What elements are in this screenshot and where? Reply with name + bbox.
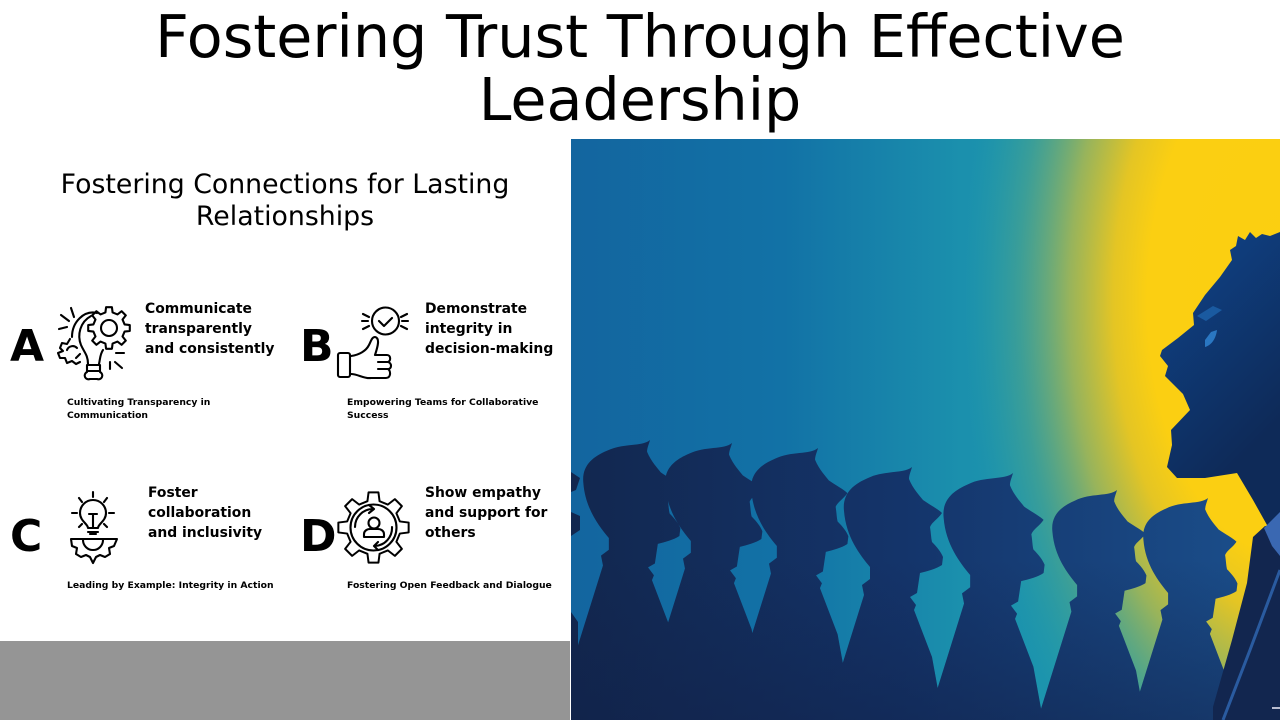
heading A: and consistently [145,340,274,356]
letter A: A [10,321,44,372]
heading D: others [425,524,476,540]
letter B: B [300,321,334,372]
heading B [425,300,553,356]
item D [300,484,552,590]
icon: thumbs up with check [336,306,409,380]
caption B [347,396,538,420]
item C [10,484,274,590]
letter D: D [300,511,337,562]
item B [300,300,553,420]
leader silhouette [1160,232,1280,720]
icon: gear with person [337,491,410,564]
icon: lightbulb over half gear [70,491,118,564]
caption D: Fostering Open Feedback and Dialogue [347,580,552,590]
subtitle [61,169,509,232]
heading D: and support for [425,504,547,520]
heading C: collaboration [148,504,251,520]
subtitle: Fostering Connections for Lasting [61,169,509,200]
caption A [67,396,210,420]
title: Fostering Trust Through Effective [155,3,1125,71]
caption B: Empowering Teams for Collaborative [347,396,538,408]
background gradient [571,139,1280,720]
heading A [145,300,274,356]
heading C: Foster [148,484,198,500]
crowd silhouettes [571,430,1280,720]
caption B: Success [347,410,388,420]
heading B: Demonstrate [425,300,527,316]
letter C: C [10,511,42,562]
subtitle: Relationships [196,201,374,232]
icon: lightbulb with gears [57,306,131,380]
heading C [148,484,262,540]
heading C: and inclusivity [148,524,262,540]
title [155,3,1125,134]
heading A: Communicate [145,300,252,316]
heading B: decision-making [425,340,553,356]
grey footer band [0,641,570,720]
heading D [425,484,548,540]
heading A: transparently [145,320,252,336]
caption A: Cultivating Transparency in [67,396,210,408]
title: Leadership [479,66,801,134]
caption A: Communication [67,410,148,420]
heading D: Show empathy [425,484,541,500]
heading B: integrity in [425,320,512,336]
illustration: crowd listening to shouting leader [571,139,1280,720]
item A [10,300,274,420]
caption C: Leading by Example: Integrity in Action [67,580,274,590]
